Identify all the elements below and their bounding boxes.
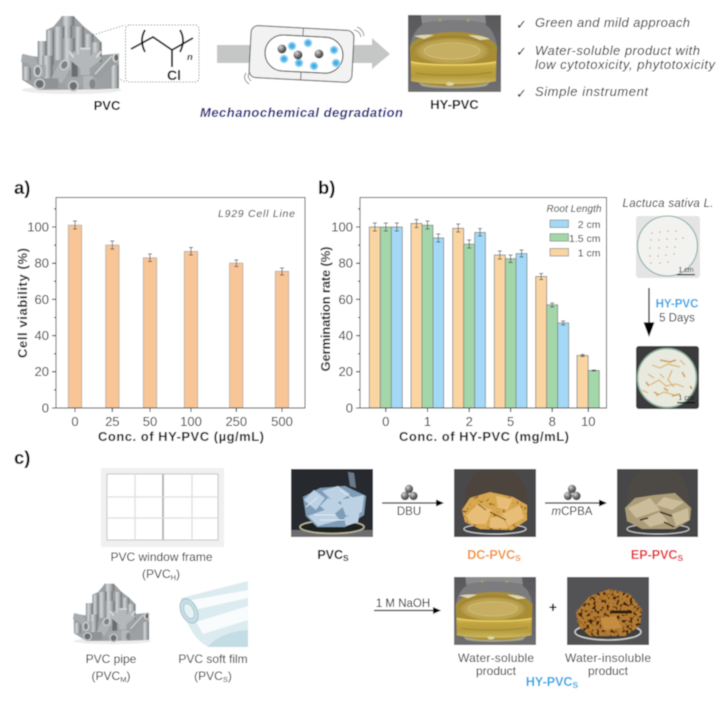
label: HY-PVC treatment: HY-PVC: [656, 298, 698, 310]
arrow: DBU step: DBU: [397, 506, 421, 518]
bar chart: germination rate: 5: [507, 414, 514, 429]
bar chart: cell viability: 50: [143, 414, 157, 429]
label: soft film: PVC soft film: [178, 652, 248, 666]
bar chart: germination rate: 100: [331, 220, 353, 234]
bar chart: cell viability: 20: [35, 364, 49, 379]
bar chart: germination rate: Germination rate (%): [318, 246, 333, 372]
label: PVC-M: M: [120, 675, 126, 684]
callout: PVC repeat unit structure: [126, 25, 199, 83]
callout: PVC repeat unit structure: Cl: [167, 67, 181, 83]
legend: root length: 2 cm: [578, 219, 601, 231]
bar chart: cell viability: 250: [225, 414, 247, 429]
bar chart: cell viability: 100: [180, 414, 202, 429]
bar chart: germination rate: 0: [382, 414, 389, 429]
panel c heading: c): [14, 447, 30, 468]
label: PVC-S: PVC: [317, 548, 343, 562]
photo: dish with seeds: 1 cm: [678, 267, 694, 274]
label: duration: 5 Days: [659, 312, 695, 324]
label: product: product: [476, 664, 517, 678]
callout: dotted leader lines: [93, 25, 125, 82]
arrow: grey process arrow: [217, 38, 390, 69]
label: water-insoluble: Water-insoluble: [565, 651, 651, 665]
bar chart: cell viability: L929 Cell Line: [218, 208, 295, 220]
label: PVC-H: (PVC: [142, 567, 171, 581]
list: key advantages: ✓: [516, 17, 527, 32]
scheme: mechanochemical degradation overview: [22, 15, 716, 120]
label: PVC-S: S: [223, 675, 228, 684]
heading: Mechanochemical degradation: Mechanochemical degradation: [200, 105, 403, 120]
label: EP-PVC-S: EP-PVC: [631, 548, 677, 562]
panel b heading: b): [318, 177, 335, 198]
label: PVC-S: (PVC: [194, 669, 223, 683]
label: HY-PVC: HY-PVC: [430, 97, 479, 112]
label: DC-PVC-S: DC-PVC: [467, 548, 515, 562]
list: key advantages: ✓: [516, 44, 527, 59]
list: key advantages: low cytotoxicity, phytotoxicity: [535, 57, 716, 72]
list: key advantages: Water-soluble product with: [535, 43, 700, 58]
list: key advantages: [516, 15, 716, 101]
bar chart: germination rate: 20: [339, 364, 353, 379]
label: plus: +: [549, 599, 557, 615]
bar chart: germination rate: 60: [339, 292, 353, 307]
bar chart: cell viability: 500: [271, 414, 293, 429]
label: product: product: [588, 664, 629, 678]
arrow: mCPBA step: [545, 485, 607, 518]
label: water-soluble: Water-soluble: [458, 651, 534, 665]
legend: root length: 1.5 cm: [569, 233, 601, 245]
legend: root length: [546, 204, 602, 260]
icon: PVC pipes: [73, 584, 151, 644]
list: key advantages: Green and mild approach: [535, 15, 690, 30]
bar chart: germination rate: 0: [346, 400, 353, 416]
label: PVC-M: ): [126, 669, 130, 683]
photo: DC-PVC-S flakes: [454, 469, 536, 537]
photo: dish with sprouts: [636, 346, 699, 409]
bar chart: cell viability: 60: [35, 292, 49, 307]
bar chart: germination rate: [318, 198, 606, 444]
photo: EP-PVC-S flakes: [617, 469, 698, 537]
bar chart: germination rate: 80: [339, 256, 353, 270]
bar chart: germination rate: 2: [466, 414, 473, 429]
arrow: NaOH step: 1 M NaOH: [376, 598, 430, 610]
arrow: mCPBA step: mCPBA: [552, 506, 593, 518]
label: window frame: PVC window frame: [110, 550, 213, 564]
bar chart: cell viability: 80: [35, 256, 49, 270]
photo: PVC window frame: [101, 468, 224, 547]
bar chart: cell viability: [15, 198, 305, 444]
panel: lettuce germination photos: Lactuca sativa L.: [622, 198, 714, 210]
icon: PVC soft film roll: [176, 581, 248, 647]
bar chart: cell viability: 0: [42, 400, 49, 416]
panel: degradation route: [291, 469, 698, 690]
label: EP-PVC-S: S: [677, 553, 683, 563]
label: PVC pipe: PVC pipe: [86, 652, 137, 666]
photo: dish with sprouts: 1 cm: [678, 395, 694, 402]
bar chart: germination rate: 40: [339, 328, 353, 343]
list: key advantages: ✓: [516, 86, 527, 101]
label: PVC-H: ): [176, 567, 180, 581]
photo: dish with seeds: [636, 216, 700, 278]
callout: PVC repeat unit structure: n: [187, 52, 193, 63]
label: PVC-S: S: [343, 553, 349, 563]
bar chart: cell viability: Cell viability (%): [15, 248, 30, 358]
bar chart: germination rate: 10: [581, 414, 596, 429]
panel: lettuce germination photos: [622, 198, 714, 409]
photo: water-soluble product: [454, 577, 536, 645]
bar chart: cell viability: Conc. of HY-PVC (µg/mL): [98, 429, 264, 444]
photo: HY-PVC solution: [408, 15, 501, 92]
label: PVC: PVC: [94, 98, 121, 113]
panel: PVC sources: [73, 468, 248, 684]
label: HY-PVC-S: S: [572, 680, 578, 690]
arrow: 5 days treatment: [644, 288, 654, 335]
label: PVC-S: ): [228, 669, 232, 683]
bar chart: germination rate: 8: [549, 414, 556, 429]
label: HY-PVC-S: HY-PVC: [526, 675, 572, 689]
bar chart: cell viability: 40: [35, 328, 49, 343]
label: PVC-H: H: [171, 573, 176, 582]
label: PVC-M: (PVC: [92, 669, 120, 683]
bar chart: germination rate: 1: [424, 414, 431, 429]
label: DC-PVC-S: S: [515, 553, 521, 563]
photo: PVC-S flakes: [291, 469, 373, 537]
panel a heading: a): [14, 177, 30, 198]
bar chart: germination rate: Conc. of HY-PVC (mg/mL): [399, 429, 569, 444]
photo: water-insoluble product: [567, 577, 649, 645]
list: key advantages: Simple instrument: [535, 84, 649, 99]
arrow: DBU step: [382, 485, 444, 518]
icon: PVC pipes pile: [22, 16, 122, 94]
arrow: NaOH step: [374, 598, 441, 614]
bar chart: cell viability: 100: [27, 220, 49, 234]
bar chart: cell viability: 0: [71, 414, 79, 429]
legend: root length: 1 cm: [578, 248, 601, 260]
icon: ball mill jar: [245, 25, 364, 84]
legend: root length: Root Length: [546, 204, 602, 215]
bar chart: cell viability: 25: [105, 414, 120, 429]
